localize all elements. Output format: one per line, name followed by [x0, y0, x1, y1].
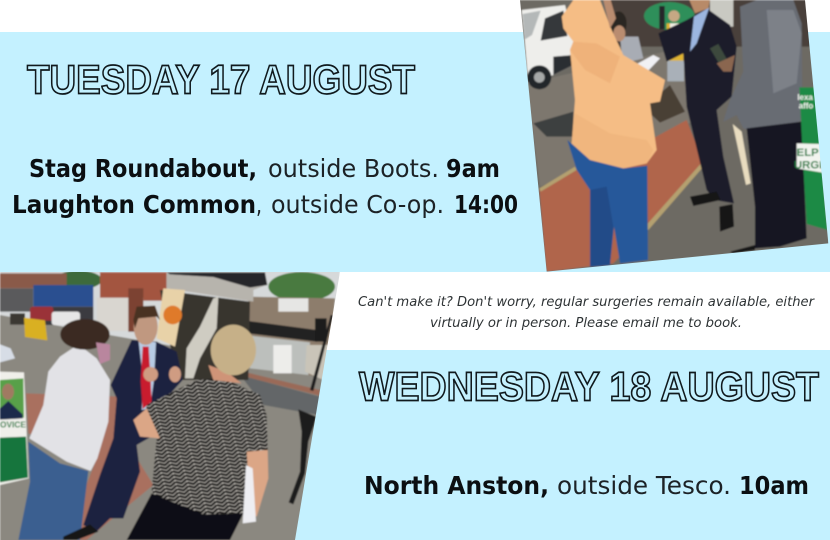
green campaign banner: affo: [799, 102, 813, 111]
man in navy suit and red tie: [63, 306, 183, 540]
woman in peach hoodie and jeans: [562, 0, 665, 267]
note: regular surgeries remain available: virtually or in person. Please email me to book.: [430, 315, 742, 331]
traffic light pole: [310, 315, 333, 391]
Tuesday line 1: Stag Roundabout: Stag Roundabout,: [29, 154, 257, 183]
brick building: [100, 272, 167, 301]
photo background ground: [510, 0, 830, 273]
sky: [0, 272, 340, 346]
top white band: [0, 0, 830, 32]
pavement ground: [0, 315, 340, 540]
Tuesday line 2: Laughton Common: outside Co-op.: [271, 190, 444, 219]
woman in white jacket and jeans: [18, 319, 110, 540]
seated woman with paper: [620, 37, 643, 62]
red brick pavement: [539, 120, 703, 272]
left shops and parked cars: [0, 273, 67, 288]
green campaign banner: [794, 87, 827, 230]
background storefront: [610, 0, 810, 47]
handbag: [650, 85, 685, 123]
Tuesday line 1: Stag Roundabout: 9am: [446, 154, 500, 183]
road surface: [527, 47, 697, 187]
man in grey jacket: [717, 0, 807, 253]
campaign board: OVICE: [0, 419, 26, 429]
red brick paving: [26, 393, 153, 540]
Tuesday line 1: Stag Roundabout: [29, 154, 500, 183]
Wednesday line: North Anston: 10am: [739, 471, 809, 500]
green campaign banner: URGI: [794, 159, 822, 171]
advertising kiosk: [157, 272, 267, 380]
Wednesday line: North Anston: North Anston,: [364, 471, 549, 500]
Tuesday line 2: Laughton Common: Laughton Common: [12, 190, 256, 219]
Wednesday line: North Anston: outside Tesco.: [557, 471, 731, 500]
older woman in patterned top: [127, 325, 268, 540]
black railing: [289, 409, 316, 504]
umbrella and distant woman: [644, 2, 695, 30]
white van: [522, 5, 575, 83]
green campaign banner: ELP: [797, 147, 819, 159]
note: regular surgeries remain available: Can't make it? Don't worry, regular surgeries remain available, either: [358, 294, 815, 310]
Tuesday line 2: Laughton Common: [12, 190, 518, 219]
panel: surgery note background: [320, 272, 830, 350]
note: regular surgeries remain available: [358, 294, 815, 331]
green campaign banner: lexa: [797, 93, 813, 102]
Wednesday line: North Anston: [364, 471, 809, 500]
man in dark suit: [658, 0, 737, 232]
heading: Tuesday 17 August: TUESDAY 17 AUGUST: [27, 56, 415, 102]
campaign board: [0, 344, 29, 485]
right building and shopfront: [248, 297, 335, 378]
Tuesday line 2: Laughton Common: 14:00: [454, 190, 518, 219]
panel: Wednesday background: [280, 350, 830, 540]
Tuesday line 2: Laughton Common: ,: [256, 190, 262, 219]
photo: campaigner talking with residents beside a green banner: [510, 0, 830, 273]
Tuesday line 1: Stag Roundabout: outside Boots.: [268, 154, 439, 183]
road: [244, 377, 319, 415]
bench and yellow barrier: [10, 313, 25, 325]
panel: Tuesday background: [0, 32, 830, 272]
photo: campaigner in red tie talking with two women on a high street: [0, 265, 340, 540]
trees: [62, 272, 102, 288]
